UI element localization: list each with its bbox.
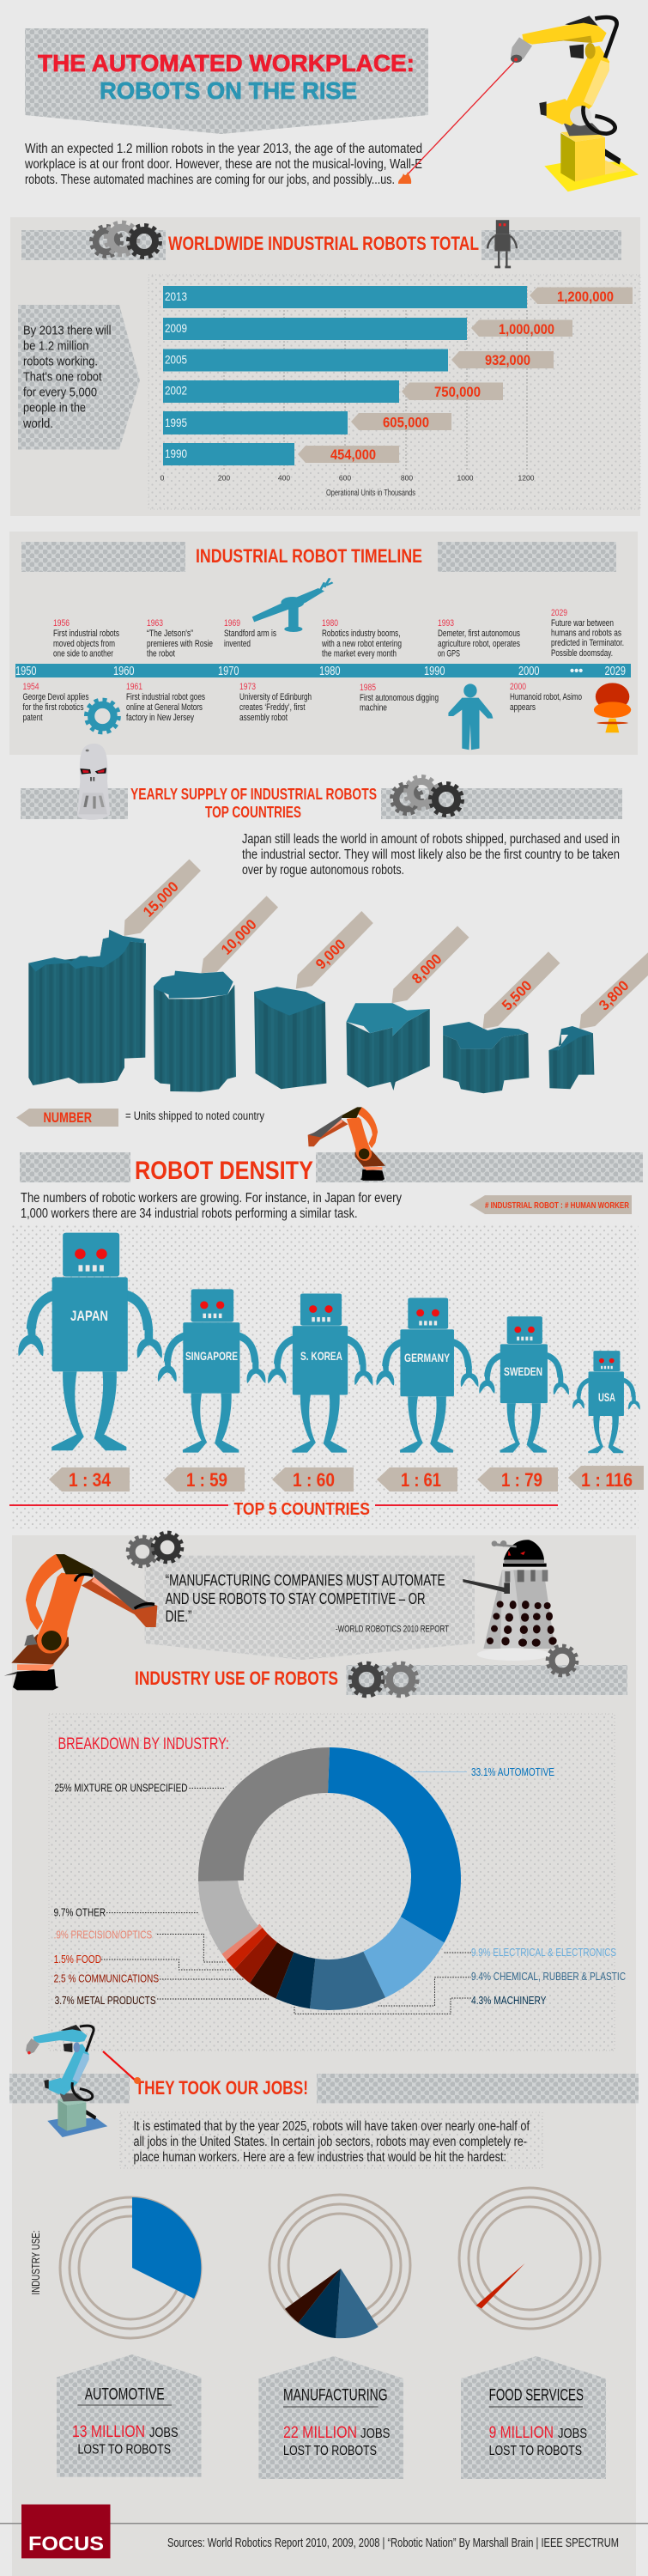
bar chart: 2005 — [165, 354, 187, 366]
quote banner: DIE.” — [166, 1608, 192, 1625]
icon: blue robot arm with laser — [26, 2025, 141, 2137]
country labels: USA — [598, 1390, 615, 1404]
text: density intro: 1,000 workers there are 34 industrial robots performing a similar task. — [21, 1206, 357, 1221]
chart: country map columns — [28, 860, 648, 1093]
country labels: GERMANY — [404, 1351, 450, 1364]
heading: they took our jobs — [9, 2074, 639, 2103]
callout: 1.2 million: for every 5,000 — [23, 386, 97, 400]
donut labels: 2.5 % COMMUNICATIONS — [54, 1972, 159, 1985]
callout: 1.2 million: people in the — [23, 402, 86, 416]
card: automotive: LOST TO ROBOTS — [77, 2443, 171, 2458]
icon: teal gear — [87, 700, 118, 732]
value labels: 5,500 — [499, 977, 536, 1014]
value labels: 10,000 — [218, 916, 260, 958]
timeline bar: 1990 — [424, 665, 445, 678]
callout: 1.2 million: be 1.2 million — [23, 340, 89, 354]
heading: timeline: INDUSTRIAL ROBOT TIMELINE — [196, 545, 422, 567]
bar chart: 0 — [160, 474, 165, 483]
callout: 1.2 million: That's one robot — [23, 371, 101, 385]
icon: gears beside heading — [350, 1646, 577, 1696]
legend: number — [16, 1109, 264, 1127]
card: automotive: AUTOMOTIVE — [85, 2386, 165, 2404]
timeline bar: 2000 — [518, 665, 539, 678]
bar chart: 454,000 — [330, 447, 376, 463]
events above the bar: Robotics industry booms, — [322, 629, 400, 639]
country labels: S. KOREA — [300, 1349, 342, 1363]
text: 2025 estimate: all jobs in the United States. In certain job sectors, robots may even completely re- — [134, 2135, 527, 2149]
heading: yearly supply: YEARLY SUPPLY OF INDUSTRIAL ROBOTS — [130, 786, 377, 803]
ratio tags: 1 : 79 — [501, 1469, 542, 1491]
intro text: robots. These automated machines are coming for our jobs, and possibly...us. — [25, 173, 395, 187]
bar chart: 1995 — [165, 416, 187, 429]
top 5 countries label: TOP 5 COUNTRIES — [233, 1500, 370, 1519]
events below the bar: George Devol applies — [22, 692, 89, 702]
events below the bar: assembly robot — [239, 713, 288, 723]
events below the bar: 1961 — [126, 682, 142, 692]
icon: gears — [391, 776, 462, 816]
events below the bar: appears — [510, 702, 536, 713]
bar chart: 800 — [401, 474, 413, 483]
bar chart: 2002 — [165, 385, 187, 397]
bar chart: 1,000,000 — [499, 321, 554, 337]
card: manufacturing: 22 MILLION — [283, 2424, 357, 2442]
events above the bar: the market every month — [322, 649, 397, 659]
heading: industry use — [135, 1665, 627, 1695]
quote banner: -WORLD ROBOTICS 2010 REPORT — [336, 1625, 449, 1635]
timeline bar — [15, 664, 631, 678]
country labels: SWEDEN — [504, 1364, 542, 1378]
heading: yearly supply: TOP COUNTRIES — [205, 804, 301, 821]
legend: number: = Units shipped to noted country — [125, 1109, 264, 1122]
events below the bar: machine — [360, 702, 387, 713]
events above the bar: 2029 — [551, 608, 567, 618]
text: 2025 estimate: place human workers. Here are a few industries that would be hit the hardest: — [134, 2150, 506, 2165]
bar chart: 600 — [339, 474, 351, 483]
events below the bar: Humanoid robot, Asimo — [510, 692, 582, 702]
events below the bar: 1985 — [360, 683, 376, 693]
text: japan leads — [242, 832, 620, 878]
card: automotive: JOBS — [149, 2426, 179, 2440]
ratio tags: 1 : 116 — [581, 1469, 633, 1491]
ratio tags: 1 : 59 — [186, 1469, 227, 1491]
panel: donut chart: BREAKDOWN BY INDUSTRY: — [58, 1735, 229, 1753]
title banner — [25, 28, 428, 134]
events above the bar: 1993 — [438, 618, 454, 629]
text: 2025 estimate — [120, 2112, 542, 2168]
events below the bar: 1973 — [239, 682, 256, 692]
donut labels: 25% MIXTURE OR UNSPECIFIED — [55, 1781, 187, 1794]
text: density intro: The numbers of robotic workers are growing. For instance, in Japan for every — [21, 1191, 402, 1206]
events above the bar: 1980 — [322, 618, 338, 629]
bar chart: 1,200,000 — [557, 289, 614, 305]
ratio tags — [49, 1466, 644, 1492]
icon: standford arm — [252, 578, 333, 632]
donut labels: 4.3% MACHINERY — [471, 1994, 547, 2007]
events below the bar: First autonomous digging — [360, 693, 439, 703]
card: food services: 9 MILLION — [489, 2424, 554, 2442]
timeline bar: 1960 — [113, 665, 134, 678]
events below the bar: factory in New Jersey — [126, 713, 194, 723]
events above the bar: 1963 — [147, 618, 163, 629]
icon: small grey robot — [488, 220, 517, 268]
callout: 1.2 million: robots working. — [23, 355, 98, 369]
icon: gears above quote — [128, 1533, 182, 1566]
donut labels: 9.7% OTHER — [54, 1906, 106, 1918]
events above the bar: premieres with Rosie — [147, 639, 213, 649]
icon: terminator skull — [77, 744, 110, 820]
events above the bar: predicted in Terminator. — [551, 638, 624, 648]
map columns: remaining countries — [254, 987, 594, 1093]
events below the bar: online at General Motors — [126, 702, 203, 713]
text: density intro — [21, 1191, 402, 1221]
panel: timeline — [9, 532, 638, 755]
ratio tags: 1 : 61 — [401, 1469, 441, 1491]
events below the bar: 1954 — [22, 682, 39, 692]
timeline bar: 1970 — [218, 665, 239, 678]
bar chart: 2009 — [165, 322, 187, 335]
icon: mushroom cloud — [594, 683, 631, 732]
quote banner: “MANUFACTURING COMPANIES MUST AUTOMATE — [166, 1571, 445, 1589]
icon: orange robot arm small — [308, 1107, 385, 1181]
value tags — [124, 860, 648, 1029]
bar chart: Operational Units in Thousands — [326, 489, 415, 498]
quote banner — [144, 1556, 475, 1660]
text: 2025 estimate: It is estimated that by the year 2025, robots will have taken over nearly one-half of — [134, 2119, 530, 2134]
intro text: workplace is at our front door. However, these are not the musical-loving, Wall-E — [24, 157, 422, 172]
donut labels: 33.1% AUTOMOTIVE — [471, 1765, 554, 1778]
panel: lower section background — [12, 1535, 636, 2576]
intro text — [24, 142, 422, 187]
panel: worldwide total — [10, 217, 640, 516]
donut labels: 3.7% METAL PRODUCTS — [55, 1994, 156, 2007]
bar chart: 932,000 — [485, 352, 530, 368]
intro text: With an expected 1.2 million robots in the year 2013, the age of the automated — [25, 142, 422, 156]
card: automotive — [57, 2354, 201, 2477]
timeline bar: 1950 — [15, 665, 36, 678]
country labels: JAPAN — [70, 1308, 108, 1324]
map column: germany — [154, 971, 236, 1092]
events above the bar: 1969 — [224, 618, 240, 629]
icon: humanoid silhouette — [448, 683, 493, 750]
value labels — [140, 878, 633, 1014]
card: food services — [461, 2356, 606, 2479]
pie: automotive — [60, 2197, 201, 2338]
heading: robot density: ROBOT DENSITY — [135, 1157, 313, 1185]
timeline bar: 1980 — [319, 665, 340, 678]
events above the bar: humans and robots as — [551, 629, 621, 639]
events below the bar: patent — [22, 713, 43, 723]
donut labels — [54, 1765, 626, 2007]
card: manufacturing: JOBS — [360, 2427, 390, 2441]
ratio tags: 1 : 34 — [69, 1469, 112, 1491]
text: japan leads: over by rogue autonomous robots. — [242, 863, 404, 878]
donut labels: .9% PRECISION/OPTICS — [54, 1929, 152, 1941]
icon: yellow robot arm with laser — [398, 15, 639, 191]
icon: gears — [91, 222, 160, 258]
events above the bar: moved objects from — [53, 639, 115, 649]
events below the bar: creates ‘Freddy’, first — [239, 702, 306, 713]
quote banner: AND USE ROBOTS TO STAY COMPETITIVE – OR — [166, 1590, 426, 1607]
events above the bar: on GPS — [438, 649, 460, 659]
events above the bar: First industrial robots — [53, 629, 119, 639]
callout: 1.2 million: By 2013 there will — [23, 325, 112, 338]
legend: ratio tag — [469, 1195, 632, 1214]
country labels — [70, 1308, 615, 1404]
value labels: 9,000 — [312, 936, 349, 973]
donut labels: 1.5% FOOD — [54, 1953, 101, 1965]
card: food services: FOOD SERVICES — [489, 2386, 584, 2404]
events above the bar: with a new robot entering — [321, 639, 402, 649]
axis label: industry use: INDUSTRY USE: — [29, 2231, 42, 2294]
section heading band: WORLDWIDE INDUSTRIAL ROBOTS TOTAL — [168, 233, 479, 254]
donut leader lines — [101, 1788, 471, 2014]
bar chart: 2013 — [165, 290, 187, 303]
title banner: ROBOTS ON THE RISE — [100, 77, 357, 104]
heading: yearly supply — [21, 786, 622, 821]
ratio tags: 1 : 60 — [293, 1469, 335, 1491]
value labels: 15,000 — [140, 878, 182, 920]
card: manufacturing: MANUFACTURING — [283, 2386, 388, 2404]
callout: 1.2 million — [18, 305, 140, 450]
events below the bar: First industrial robot goes — [126, 692, 205, 702]
events above the bar: Possible doomsday. — [551, 648, 613, 659]
card: manufacturing: LOST TO ROBOTS — [283, 2444, 377, 2458]
robot figures — [18, 1233, 640, 1453]
timeline bar: 2029 — [604, 665, 626, 678]
footer — [0, 2505, 648, 2558]
bar chart: 200 — [218, 474, 230, 483]
icon: dalek — [463, 1540, 557, 1661]
callout: 1.2 million: world. — [22, 417, 53, 431]
bar chart: 400 — [278, 474, 290, 483]
events below the bar: University of Edinburgh — [239, 692, 312, 702]
icon: orange robot arm — [4, 1554, 157, 1690]
panel: donut chart — [49, 1714, 626, 2050]
timeline bar: ••• — [570, 665, 583, 678]
title line one: THE AUTOMATED WORKPLACE: — [38, 50, 415, 76]
events above the bar: the robot — [147, 649, 175, 659]
section heading band — [21, 230, 621, 260]
card: automotive: 13 MILLION — [72, 2423, 145, 2441]
logo: focus: FOCUS — [28, 2532, 104, 2555]
card: food services: LOST TO ROBOTS — [489, 2444, 582, 2458]
map column: japan — [28, 930, 146, 1085]
events above the bar: agriculture robot, operates — [438, 639, 520, 649]
events above the bar — [53, 608, 624, 659]
events above the bar: “The Jetson's” — [147, 629, 193, 639]
card: food services: JOBS — [558, 2427, 587, 2441]
events above the bar: invented — [224, 639, 251, 649]
value labels: 8,000 — [409, 951, 445, 987]
bar chart: 1200 — [518, 474, 535, 483]
events below the bar: for the first robotics — [22, 702, 84, 713]
heading: they took our jobs: THEY TOOK OUR JOBS! — [136, 2077, 308, 2099]
donut segments — [198, 1747, 461, 2010]
bar chart: 605,000 — [383, 414, 429, 431]
events below the bar: 2000 — [510, 682, 526, 692]
bar chart: 1000 — [457, 474, 474, 483]
legend: number: NUMBER — [43, 1109, 92, 1126]
value labels: 3,800 — [596, 977, 633, 1014]
pie: food services — [459, 2188, 600, 2329]
heading: industry use: INDUSTRY USE OF ROBOTS — [135, 1668, 338, 1689]
logo: focus — [21, 2505, 110, 2558]
events above the bar: Standford arm is — [224, 629, 276, 639]
card: manufacturing — [258, 2356, 403, 2479]
events above the bar: Demeter, first autonomous — [438, 629, 520, 639]
pie: manufacturing — [269, 2195, 410, 2338]
bar chart: 750,000 — [434, 384, 481, 400]
events above the bar: Future war between — [551, 618, 614, 629]
heading: timeline — [21, 542, 616, 572]
panel: robots density chart — [9, 1224, 644, 1528]
heading: robot density — [20, 1152, 643, 1185]
bar chart — [148, 275, 640, 509]
events above the bar: one side to another — [53, 649, 113, 659]
country labels: SINGAPORE — [185, 1349, 238, 1363]
events below the bar — [22, 682, 582, 723]
bar chart: 1990 — [165, 447, 187, 460]
events above the bar: 1956 — [53, 618, 70, 629]
